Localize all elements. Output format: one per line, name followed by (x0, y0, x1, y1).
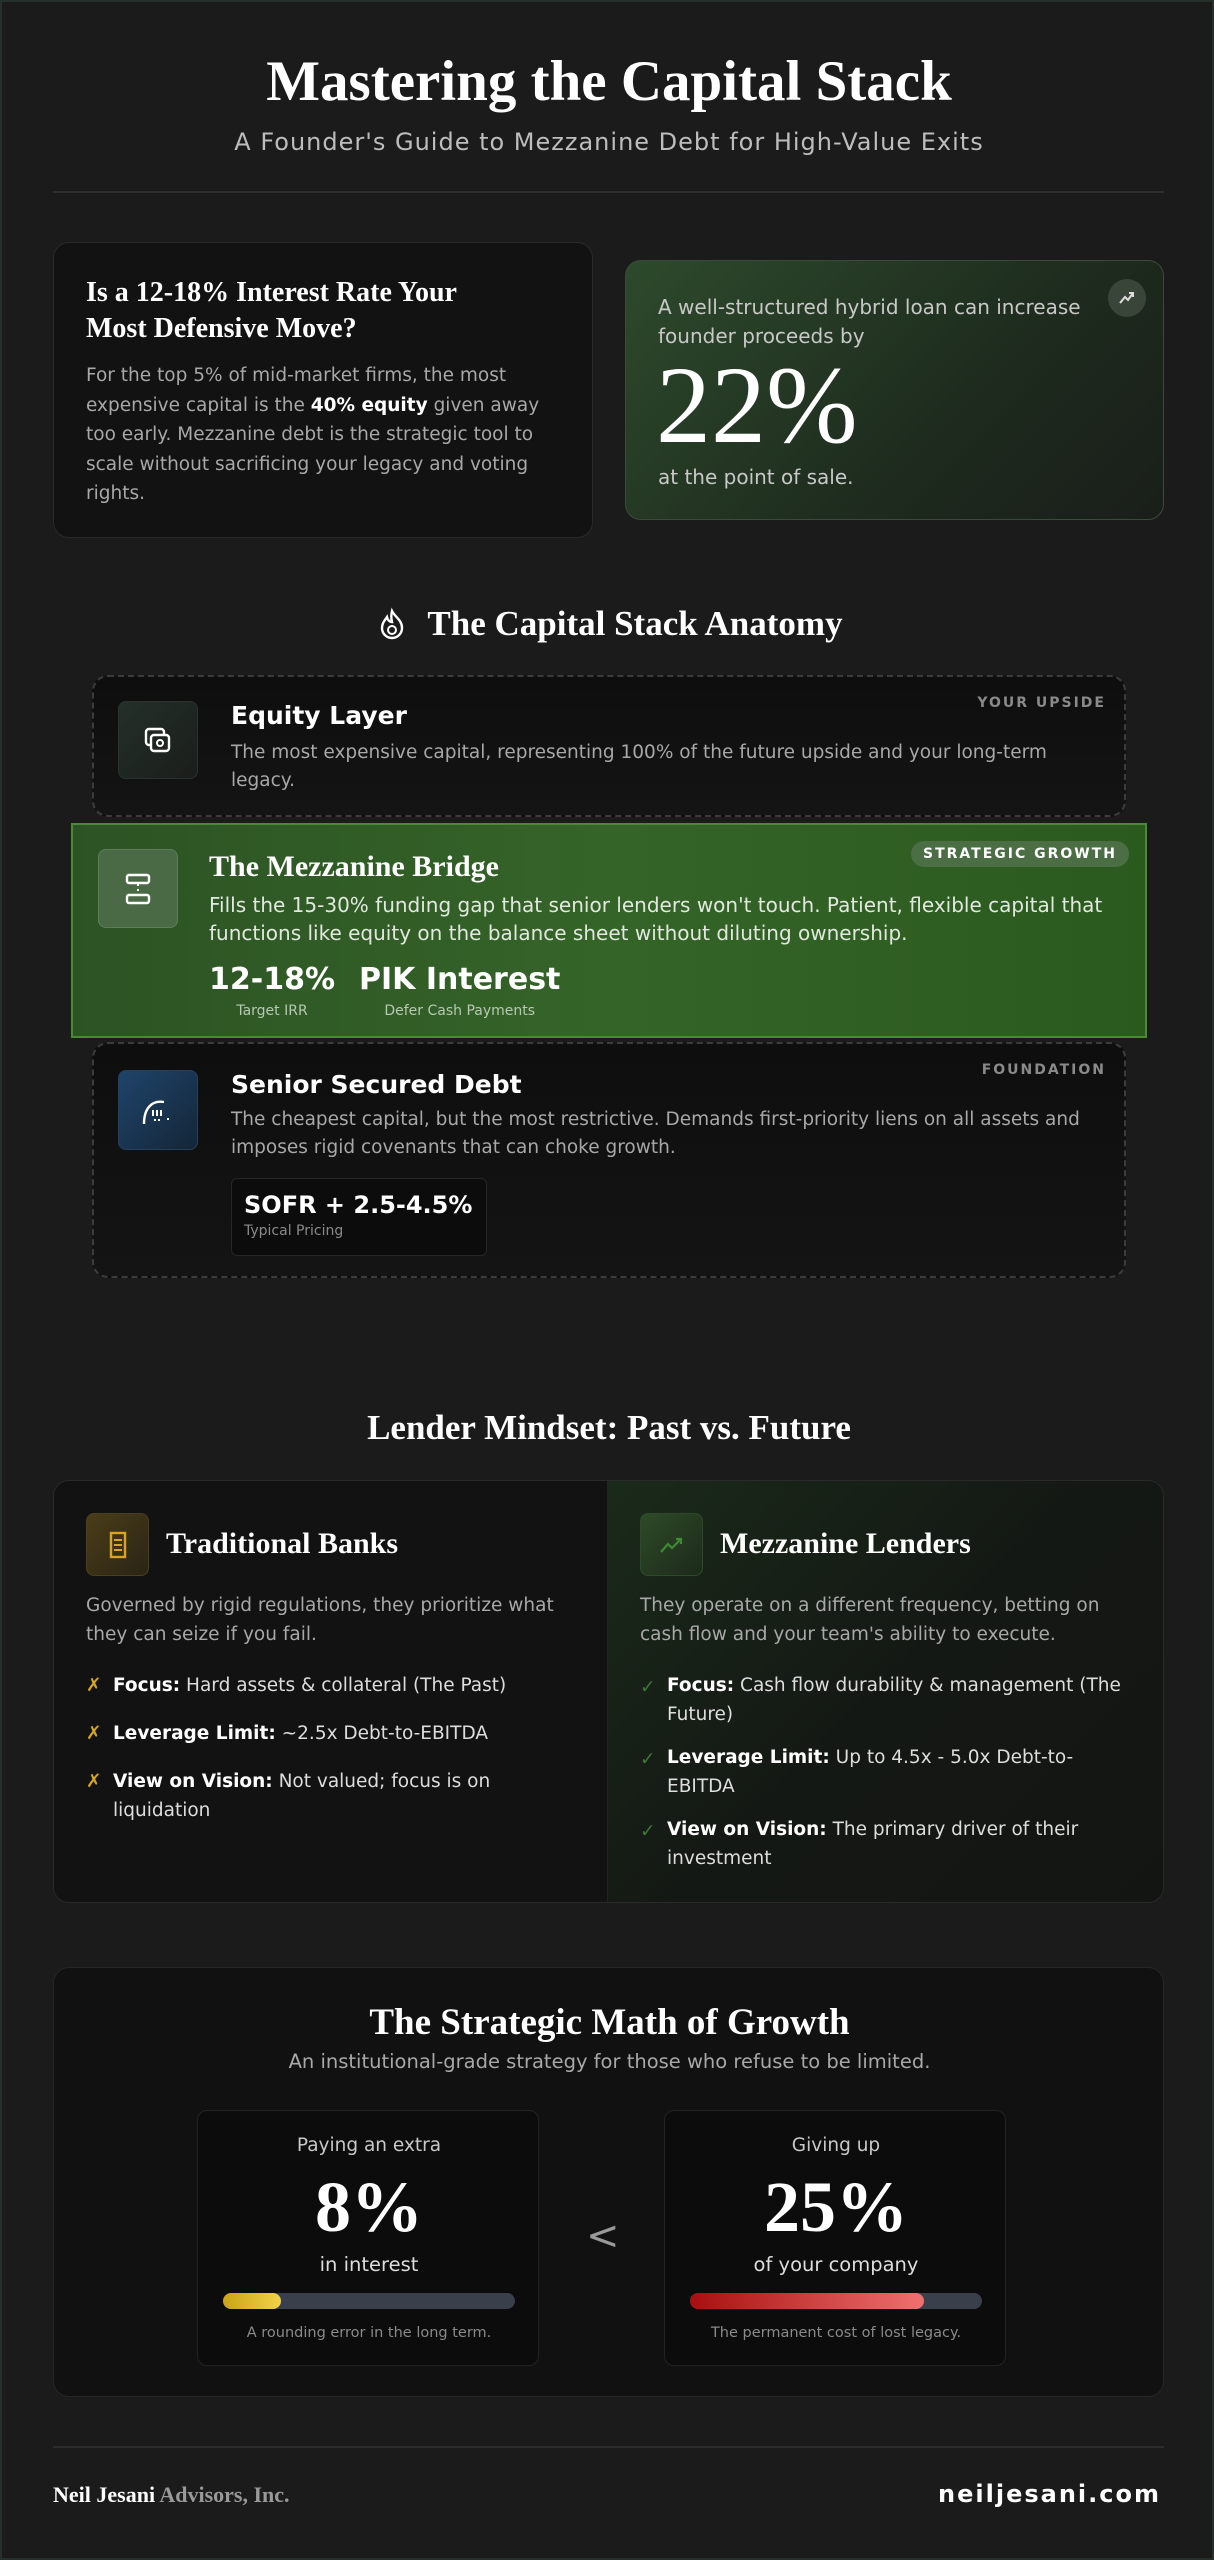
list: bank criteria: View on Vision: Not valued; focus is on liquidation (113, 1771, 490, 1821)
footer: website: neiljesani.com (938, 2480, 1161, 2508)
column: traditional banks (54, 1481, 607, 1904)
card: 25% company: The permanent cost of lost legacy. (711, 2325, 961, 2341)
icon: trend arrow (1108, 279, 1146, 317)
panel: strategic math (53, 1967, 1164, 2397)
symbol: less than: < (586, 2213, 620, 2259)
list: mezz criteria (640, 1675, 1121, 1869)
heading: The Strategic Math of Growth (369, 2002, 850, 2043)
title: Mastering the Capital Stack (266, 50, 952, 113)
big number: 22% (656, 344, 858, 466)
subtitle: A Founder's Guide to Mezzanine Debt for High-Value Exits (234, 128, 984, 156)
list: bank criteria: ✗ (86, 1723, 102, 1744)
card: 25% company: Giving up (792, 2135, 880, 2156)
icon: bank (86, 1513, 149, 1576)
stat box: pricing: SOFR + 2.5-4.5% (244, 1191, 472, 1219)
heading: lender mindset: Lender Mindset: Past vs. Future (367, 1408, 851, 1447)
bar: equity (690, 2293, 982, 2309)
stat: pik: Defer Cash Payments (384, 1003, 535, 1019)
subtitle: An institutional-grade strategy for those who refuse to be limited. (289, 2050, 930, 2073)
column: mezzanine lenders (607, 1481, 1165, 1904)
list: mezz criteria: ✓ (640, 1677, 656, 1698)
text block: intro: For the top 5% of mid-market firms, the most expensive capital is the 40% equity given away too early. Mezzanine debt is the strategic tool to scale without sacrificing your legacy and voting rights. (86, 365, 539, 504)
heading: Equity Layer (231, 701, 407, 730)
icon: senior (118, 1070, 198, 1150)
card: 25% company (664, 2110, 1006, 2366)
text: They operate on a different frequency, betting on cash flow and your team's ability to execute. (640, 1595, 1099, 1645)
stat: target irr: 12-18% (209, 962, 335, 997)
text: lead: A well-structured hybrid loan can increase founder proceeds by (658, 295, 1081, 348)
stat box: pricing (231, 1178, 487, 1256)
stat box: pricing: Typical Pricing (244, 1223, 343, 1239)
tag: FOUNDATION (982, 1062, 1106, 1078)
badge (911, 841, 1129, 867)
stat: pik (359, 962, 560, 1019)
panel: mezzanine bridge (71, 823, 1147, 1038)
icon: bridge (98, 849, 178, 928)
text: Governed by rigid regulations, they prioritize what they can seize if you fail. (86, 1595, 554, 1645)
heading: Traditional Banks (166, 1527, 398, 1560)
list: bank criteria: Focus: Hard assets & collateral (The Past) (113, 1675, 506, 1696)
panel: senior secured debt (92, 1042, 1126, 1278)
card: 8% interest: in interest (320, 2253, 418, 2276)
list: mezz criteria: ✓ (640, 1821, 656, 1842)
icon: growth (640, 1513, 703, 1576)
list: mezz criteria: Leverage Limit: Up to 4.5x - 5.0x Debt-to-EBITDA (667, 1747, 1073, 1797)
list: mezz criteria: View on Vision: The primary driver of their investment (667, 1819, 1078, 1869)
icon: equity (118, 701, 198, 779)
heading: Senior Secured Debt (231, 1070, 522, 1099)
heading: question: Is a 12-18% Interest Rate Your Most Defensive Move? (86, 277, 456, 344)
card: 8% interest: Paying an extra (297, 2135, 441, 2156)
panel: intro question (53, 242, 593, 538)
text: tail: at the point of sale. (658, 465, 854, 489)
list: mezz criteria: Focus: Cash flow durability & management (The Future) (667, 1675, 1121, 1725)
list: bank criteria: Leverage Limit: ~2.5x Debt-to-EBITDA (113, 1723, 488, 1744)
card: 8% interest: A rounding error in the long term. (247, 2325, 491, 2341)
tag: YOUR UPSIDE (977, 695, 1106, 711)
panel: equity layer (92, 675, 1126, 817)
stat: pik: PIK Interest (359, 962, 560, 997)
big number: 8% (315, 2167, 423, 2247)
list: bank criteria (86, 1675, 506, 1821)
stat: target irr (209, 962, 335, 1019)
card: 8% interest (197, 2110, 539, 2366)
footer: brand: Neil Jesani Advisors, Inc. (53, 2482, 290, 2507)
stat: target irr: Target IRR (236, 1003, 308, 1019)
card: 25% company: of your company (754, 2253, 918, 2276)
heading: capital stack anatomy: The Capital Stack Anatomy (427, 604, 843, 643)
heading: The Mezzanine Bridge (209, 850, 499, 883)
list: bank criteria: ✗ (86, 1771, 102, 1792)
text: The most expensive capital, representing 100% of the future upside and your long-term legacy. (231, 742, 1047, 791)
heading: Mezzanine Lenders (720, 1527, 971, 1560)
big number: 25% (764, 2167, 908, 2247)
text: Fills the 15-30% funding gap that senior lenders won't touch. Patient, flexible capital that functions like equity on the balance sheet without diluting ownership. (209, 893, 1102, 945)
badge: STRATEGIC GROWTH (923, 846, 1117, 862)
panel: comparison (53, 1480, 1164, 1903)
text: The cheapest capital, but the most restrictive. Demands first-priority liens on all assets and imposes rigid covenants that can choke growth. (231, 1109, 1080, 1158)
bar: interest (223, 2293, 515, 2309)
list: bank criteria: ✗ (86, 1675, 102, 1696)
panel: 22% stat (625, 260, 1164, 520)
list: mezz criteria: ✓ (640, 1749, 656, 1770)
